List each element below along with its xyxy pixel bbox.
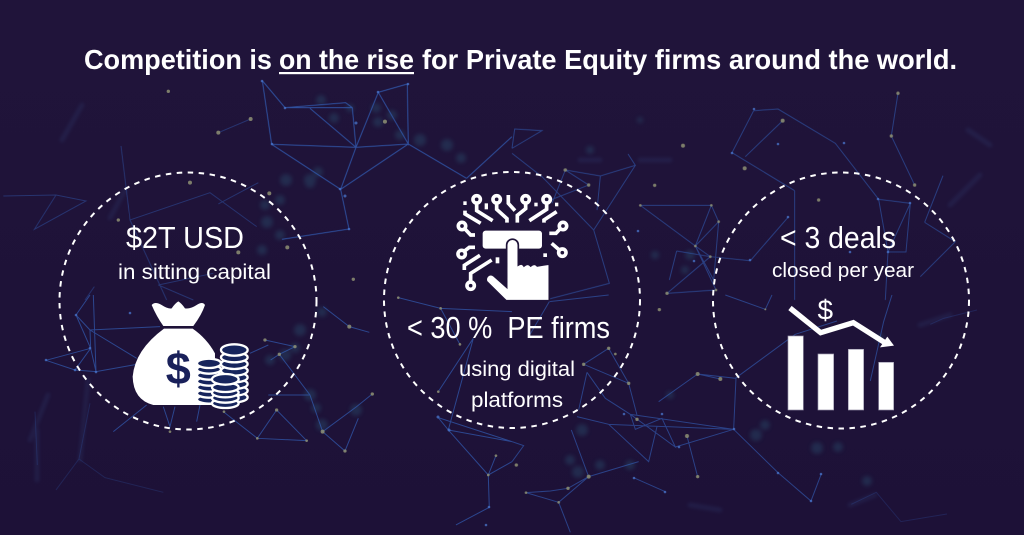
icon: touch circuit [458,195,567,301]
stat: $2T USD: $2T USD [126,220,244,255]
caption: closed per year: closed per year [772,260,914,282]
icon: declining bar chart: $ [818,294,834,325]
icon: money bag with coins: $ [166,343,191,394]
title: on the rise [279,44,414,75]
panel: digital platforms [384,172,640,428]
title: for Private Equity firms around the world. [422,44,957,75]
caption: in sitting capital: in sitting capital [118,261,271,284]
dashed circle [384,172,640,428]
panel: deals per year [713,172,969,428]
panel: sitting capital [60,172,316,430]
icon: declining bar chart [788,294,894,410]
caption: platforms: platforms [471,389,563,412]
dashed circle [60,172,316,430]
title [84,44,957,75]
stat: under 30 percent PE firms: < 30 % PE firms [407,310,610,345]
dashed circle [713,172,969,428]
stat: under 3 deals: < 3 deals [780,220,896,255]
caption: using digital: using digital [459,358,575,381]
icon: money bag with coins [133,301,248,408]
title: Competition is [84,44,272,75]
